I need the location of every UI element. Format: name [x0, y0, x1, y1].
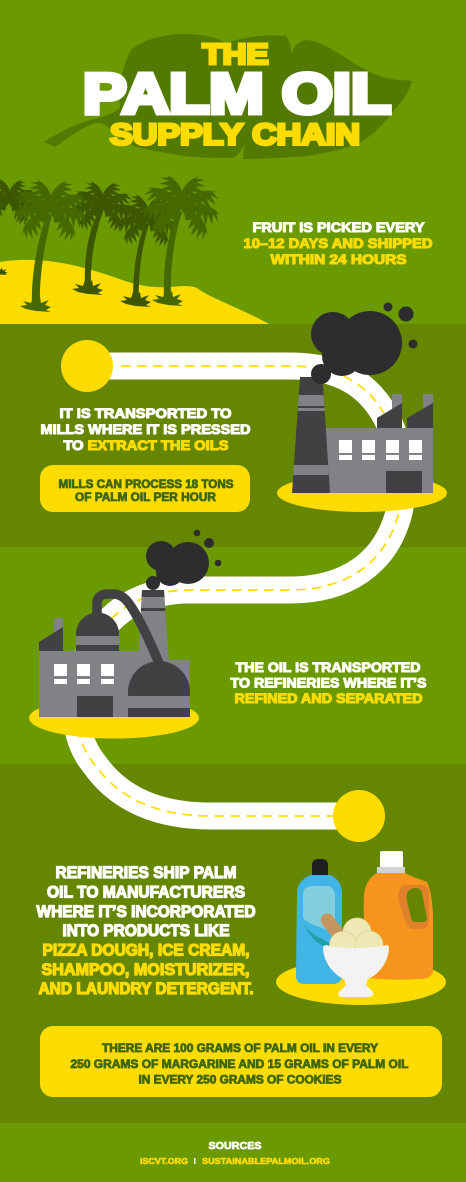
refinery building [39, 651, 140, 717]
text: fruit harvest: WITHIN 24 HOURS [270, 252, 406, 267]
mill chimney [292, 377, 330, 493]
icon: consumer products [276, 851, 446, 1005]
text: manufacturers: REFINERIES SHIP PALM [56, 864, 236, 882]
palm tree 3 [110, 189, 181, 307]
callout: mills capacity [40, 465, 250, 512]
band: manufacturers background [0, 764, 466, 1123]
text: manufacturers: AND LAUNDRY DETERGENT. [38, 980, 254, 998]
road [76, 366, 402, 816]
refinery door [77, 696, 113, 717]
text: transport to mills: TO EXTRACT THE OILS [64, 438, 228, 453]
palm tree 1 [7, 173, 90, 312]
text: manufacturers [36, 864, 256, 998]
refinery windows [54, 664, 114, 684]
text: transport to mills [40, 406, 251, 453]
text: fruit harvest: 10–12 DAYS AND SHIPPED [244, 236, 433, 251]
callout: mills capacity: OF PALM OIL PER HOUR [75, 490, 216, 504]
mill door [386, 471, 422, 493]
text: fruit harvest [244, 220, 433, 267]
icon: mill smoke [311, 302, 418, 384]
text: transport to refineries [230, 660, 426, 706]
road centre dashes [76, 366, 402, 816]
icon: refinery factory [29, 590, 199, 738]
road start circle [61, 340, 113, 392]
text: manufacturers: INTO PRODUCTS LIKE [62, 922, 230, 940]
band: refineries background [0, 547, 466, 764]
icon: palm trees [0, 168, 223, 312]
sources: SOURCES [208, 1140, 262, 1152]
products yellow base [276, 959, 446, 1005]
palm tree far left [0, 174, 39, 275]
icon: palm leaf behind title [44, 34, 412, 159]
sources: SUSTAINABLEPALMOIL.ORG [202, 1156, 330, 1166]
band: harvest background [0, 0, 466, 324]
title line: SUPPLY CHAIN: SUPPLY CHAIN [110, 118, 360, 152]
band: sources background [0, 1123, 466, 1182]
text: manufacturers: PIZZA DOUGH, ICE CREAM, [42, 942, 250, 960]
mill building [325, 428, 433, 493]
road end circle [333, 790, 385, 842]
palm tree 4 [136, 168, 223, 306]
callout: palm oil quantities: IN EVERY 250 GRAMS OF COOKIES [138, 1072, 342, 1086]
wafer [318, 911, 347, 943]
refinery roof sawtooth [39, 618, 63, 652]
icon: mill factory [277, 377, 447, 512]
text: manufacturers: WHERE IT’S INCORPORATED [36, 903, 256, 921]
callout: palm oil quantities [40, 1026, 442, 1097]
callout: mills capacity: MILLS CAN PROCESS 18 TONS [58, 477, 234, 491]
palm tree 2 [66, 176, 135, 295]
text: transport to refineries: REFINED AND SEPARATED [234, 691, 423, 706]
text: transport to mills: MILLS WHERE IT IS PRESSED [40, 422, 251, 437]
refinery yellow base [29, 698, 199, 738]
mill roof sawtooth [377, 394, 433, 429]
title line: THE: THE [202, 39, 268, 71]
refinery small tank [76, 613, 119, 651]
laundry detergent bottle [364, 851, 433, 980]
sources: ISCVT.ORG [140, 1156, 188, 1166]
title [83, 39, 391, 152]
text: transport to mills: IT IS TRANSPORTED TO [60, 406, 232, 421]
icon: yellow island [0, 260, 269, 324]
title line: PALM OIL: PALM OIL [83, 62, 391, 126]
mill yellow base [277, 474, 447, 512]
text: fruit harvest: FRUIT IS PICKED EVERY [252, 220, 424, 235]
sources [140, 1140, 330, 1166]
text: manufacturers: SHAMPOO, MOISTURIZER, [42, 961, 250, 979]
refinery pipe [97, 594, 159, 663]
callout: palm oil quantities: 250 GRAMS OF MARGARINE AND 15 GRAMS OF PALM OIL [70, 1057, 408, 1071]
ice cream scoops [330, 918, 383, 959]
ice cream bowl [323, 945, 389, 997]
mill windows [339, 440, 422, 460]
text: transport to refineries: THE OIL IS TRANSPORTED [236, 660, 421, 675]
refinery chimney [138, 590, 169, 660]
text: manufacturers: OIL TO MANUFACTURERS [47, 884, 245, 902]
text: transport to refineries: TO REFINERIES WHERE IT’S [230, 676, 426, 690]
callout: palm oil quantities: THERE ARE 100 GRAMS OF PALM OIL IN EVERY [102, 1041, 378, 1055]
icon: refinery smoke [146, 530, 221, 590]
band: mills background [0, 324, 466, 547]
refinery large tank [128, 661, 190, 717]
shampoo bottle [296, 859, 342, 984]
